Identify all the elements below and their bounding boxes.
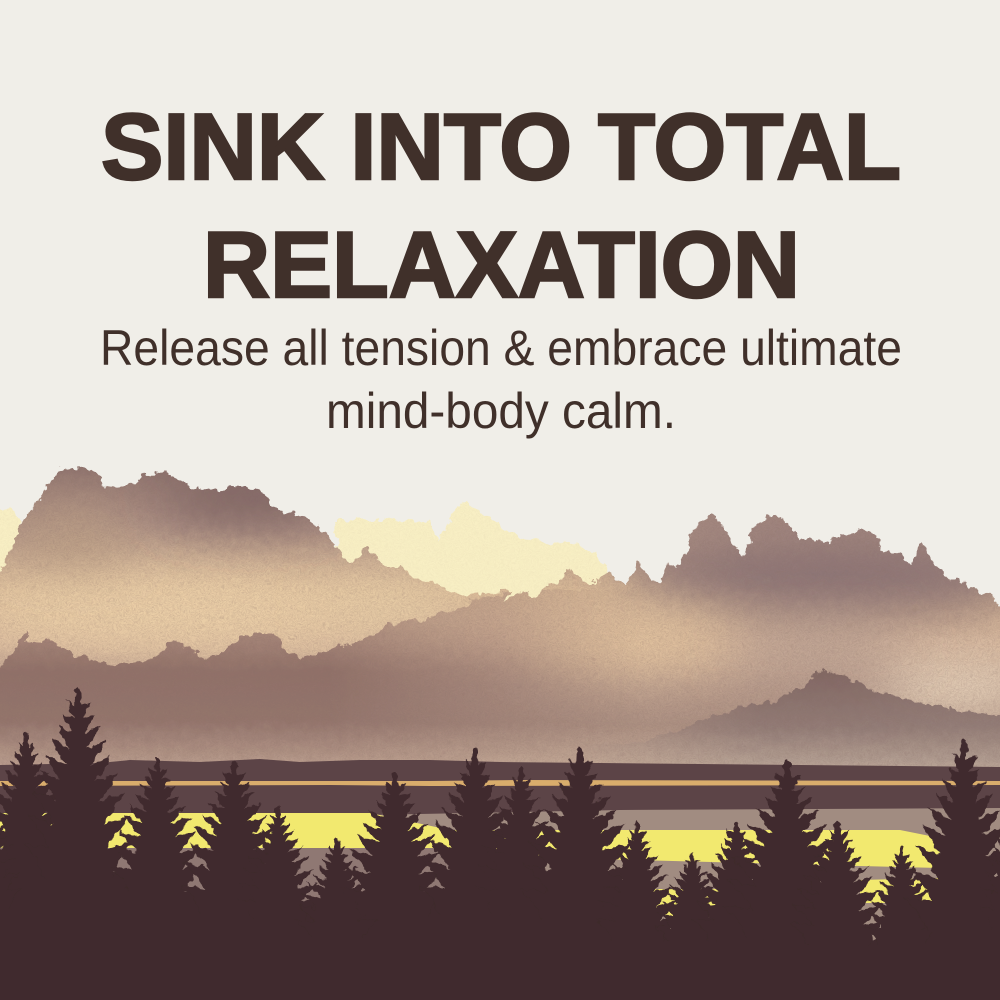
lake and far shore: [0, 759, 1000, 960]
tree: [418, 748, 532, 916]
tree: [179, 760, 289, 913]
tree line: [0, 686, 1000, 1000]
tree: [654, 853, 730, 942]
tree: [0, 791, 22, 910]
tree: [978, 801, 1000, 930]
tree: [236, 806, 320, 920]
tree: [722, 760, 852, 938]
far shoreline: [0, 759, 1000, 815]
golden shore line: [0, 780, 1000, 786]
tree: [905, 740, 1000, 933]
title: RELAXATION: [203, 212, 800, 317]
yellow reflection left: [0, 813, 940, 868]
lake backing: [0, 800, 1000, 960]
tree: [595, 821, 679, 940]
yellow reflection lower right: [640, 878, 945, 916]
tree: [111, 757, 203, 891]
tree: [692, 821, 780, 940]
watercolor: pale yellow distant peaks: [0, 501, 608, 602]
tree: [864, 846, 940, 945]
tree: [790, 821, 886, 945]
tree: [23, 686, 133, 879]
title: [101, 94, 901, 317]
title: SINK INTO TOTAL: [101, 94, 901, 199]
tree: [519, 747, 641, 920]
subtitle: [100, 320, 902, 439]
subtitle: Release all tension & embrace ultimate: [100, 320, 902, 376]
subtitle: mind-body calm.: [326, 383, 676, 439]
tree: [0, 732, 70, 871]
lower left shallows: [0, 848, 520, 948]
right foothill: [641, 668, 1000, 767]
tree: [475, 766, 567, 914]
tree: [340, 771, 450, 915]
tree: [295, 839, 379, 938]
ground: [0, 858, 1000, 1000]
mid wash ridge: [0, 588, 606, 765]
watercolor: mountain range: [0, 460, 1000, 790]
